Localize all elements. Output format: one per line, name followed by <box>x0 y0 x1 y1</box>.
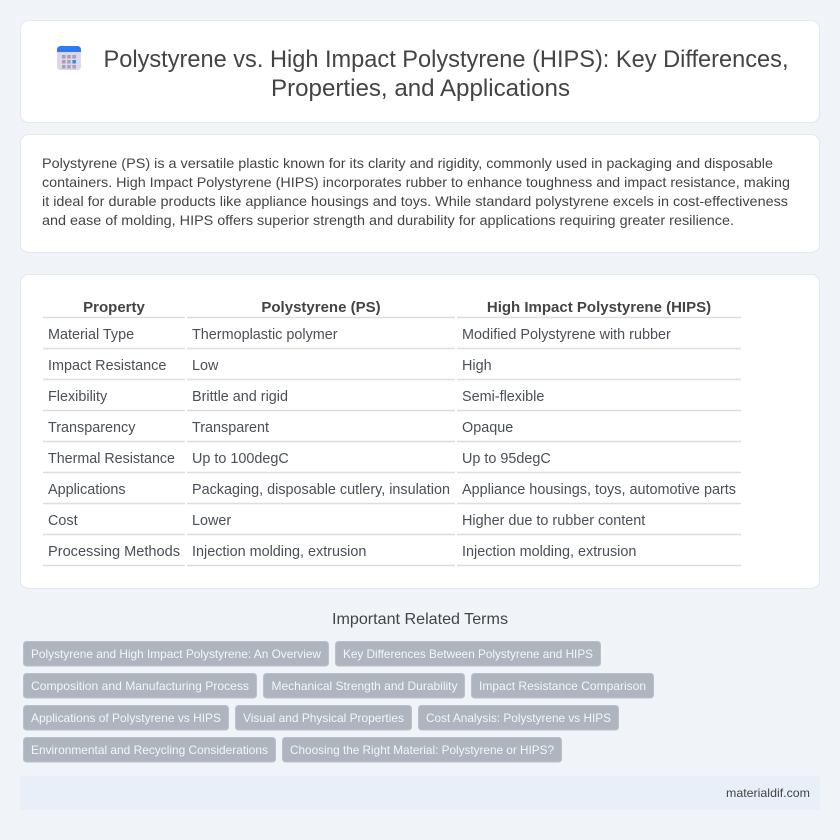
row: flexibility: Flexibility <box>48 389 108 405</box>
row: cost: Cost <box>48 513 78 529</box>
tag: Composition and Manufacturing Process <box>31 679 249 693</box>
tag: Visual and Physical Properties <box>243 711 404 725</box>
row: cost: Lower <box>192 513 231 529</box>
row: processing methods: Injection molding, extrusion <box>462 544 636 560</box>
row: cost: Higher due to rubber content <box>462 513 645 529</box>
row: applications <box>48 482 736 498</box>
row: transparency <box>48 420 513 436</box>
table header <box>83 299 711 316</box>
related term tags <box>24 642 654 762</box>
text block: introduction paragraph: containers. High Impact Polystyrene (HIPS) incorporates rubber to enhance toughness and impact resistance, making <box>42 174 790 190</box>
tag: Polystyrene and High Impact Polystyrene: An Overview <box>31 647 321 661</box>
row: transparency: Opaque <box>462 420 513 436</box>
row: applications: Packaging, disposable cutlery, insulation <box>192 482 450 498</box>
row: processing methods: Processing Methods <box>48 544 180 560</box>
tag <box>24 706 228 730</box>
table header: High Impact Polystyrene (HIPS) <box>487 299 711 316</box>
table grid lines <box>43 318 741 566</box>
row: applications: Applications <box>48 482 126 498</box>
footer: materialdif.com <box>726 786 810 800</box>
row: thermal resistance <box>48 451 551 467</box>
table header: Property <box>83 299 145 316</box>
tag: Cost Analysis: Polystyrene vs HIPS <box>426 711 611 725</box>
row: thermal resistance: Up to 100degC <box>192 451 289 467</box>
row: flexibility: Brittle and rigid <box>192 389 288 405</box>
heading: related terms: Important Related Terms <box>332 611 508 628</box>
tag <box>282 738 562 762</box>
tag <box>418 706 618 730</box>
row: thermal resistance: Up to 95degC <box>462 451 551 467</box>
row: cost <box>48 513 645 529</box>
row: transparency: Transparency <box>48 420 136 436</box>
tag <box>24 642 328 666</box>
row: material type: Material Type <box>48 327 134 343</box>
text block: introduction paragraph: it ideal for durable products like appliance housings and toys. While standard polystyrene excels in cost-effectiveness <box>42 193 788 209</box>
tag: Environmental and Recycling Considerations <box>31 743 268 757</box>
tag <box>24 738 276 762</box>
row: impact resistance: High <box>462 358 492 374</box>
row: flexibility <box>48 389 544 405</box>
row: material type: Thermoplastic polymer <box>192 327 338 343</box>
tag <box>264 674 464 698</box>
row: applications: Appliance housings, toys, automotive parts <box>462 482 736 498</box>
row: flexibility: Semi-flexible <box>462 389 544 405</box>
row: processing methods <box>48 544 636 560</box>
row: impact resistance <box>48 358 492 374</box>
text block: introduction paragraph: Polystyrene (PS) is a versatile plastic known for its clarity and rigidity, commonly used in packaging and disposable <box>42 155 773 171</box>
row: processing methods: Injection molding, extrusion <box>192 544 366 560</box>
row: impact resistance: Impact Resistance <box>48 358 166 374</box>
row: thermal resistance: Thermal Resistance <box>48 451 175 467</box>
panel: introduction <box>20 134 820 252</box>
tag: Key Differences Between Polystyrene and HIPS <box>343 647 593 661</box>
tag: Mechanical Strength and Durability <box>272 679 458 693</box>
panel: title header <box>20 20 820 122</box>
tag <box>336 642 600 666</box>
tag: Choosing the Right Material: Polystyrene or HIPS? <box>290 743 554 757</box>
text block: introduction paragraph <box>42 155 790 228</box>
title <box>104 46 788 102</box>
tag <box>236 706 412 730</box>
tag: Impact Resistance Comparison <box>479 679 646 693</box>
row: material type: Modified Polystyrene with rubber <box>462 327 671 343</box>
title: Properties, and Applications <box>271 75 570 102</box>
table header: Polystyrene (PS) <box>261 299 381 316</box>
text block: introduction paragraph: and ease of molding, HIPS offers superior strength and durability for applications requiring greater resilience. <box>42 212 734 228</box>
icon: calendar grid <box>57 46 81 70</box>
tag <box>24 674 256 698</box>
title: Polystyrene vs. High Impact Polystyrene (HIPS): Key Differences, <box>104 46 788 73</box>
row: impact resistance: Low <box>192 358 219 374</box>
tag <box>472 674 654 698</box>
row: material type <box>48 327 671 343</box>
footer <box>20 776 820 810</box>
row: transparency: Transparent <box>192 420 269 436</box>
tag: Applications of Polystyrene vs HIPS <box>31 711 221 725</box>
panel: comparison table <box>20 274 820 588</box>
